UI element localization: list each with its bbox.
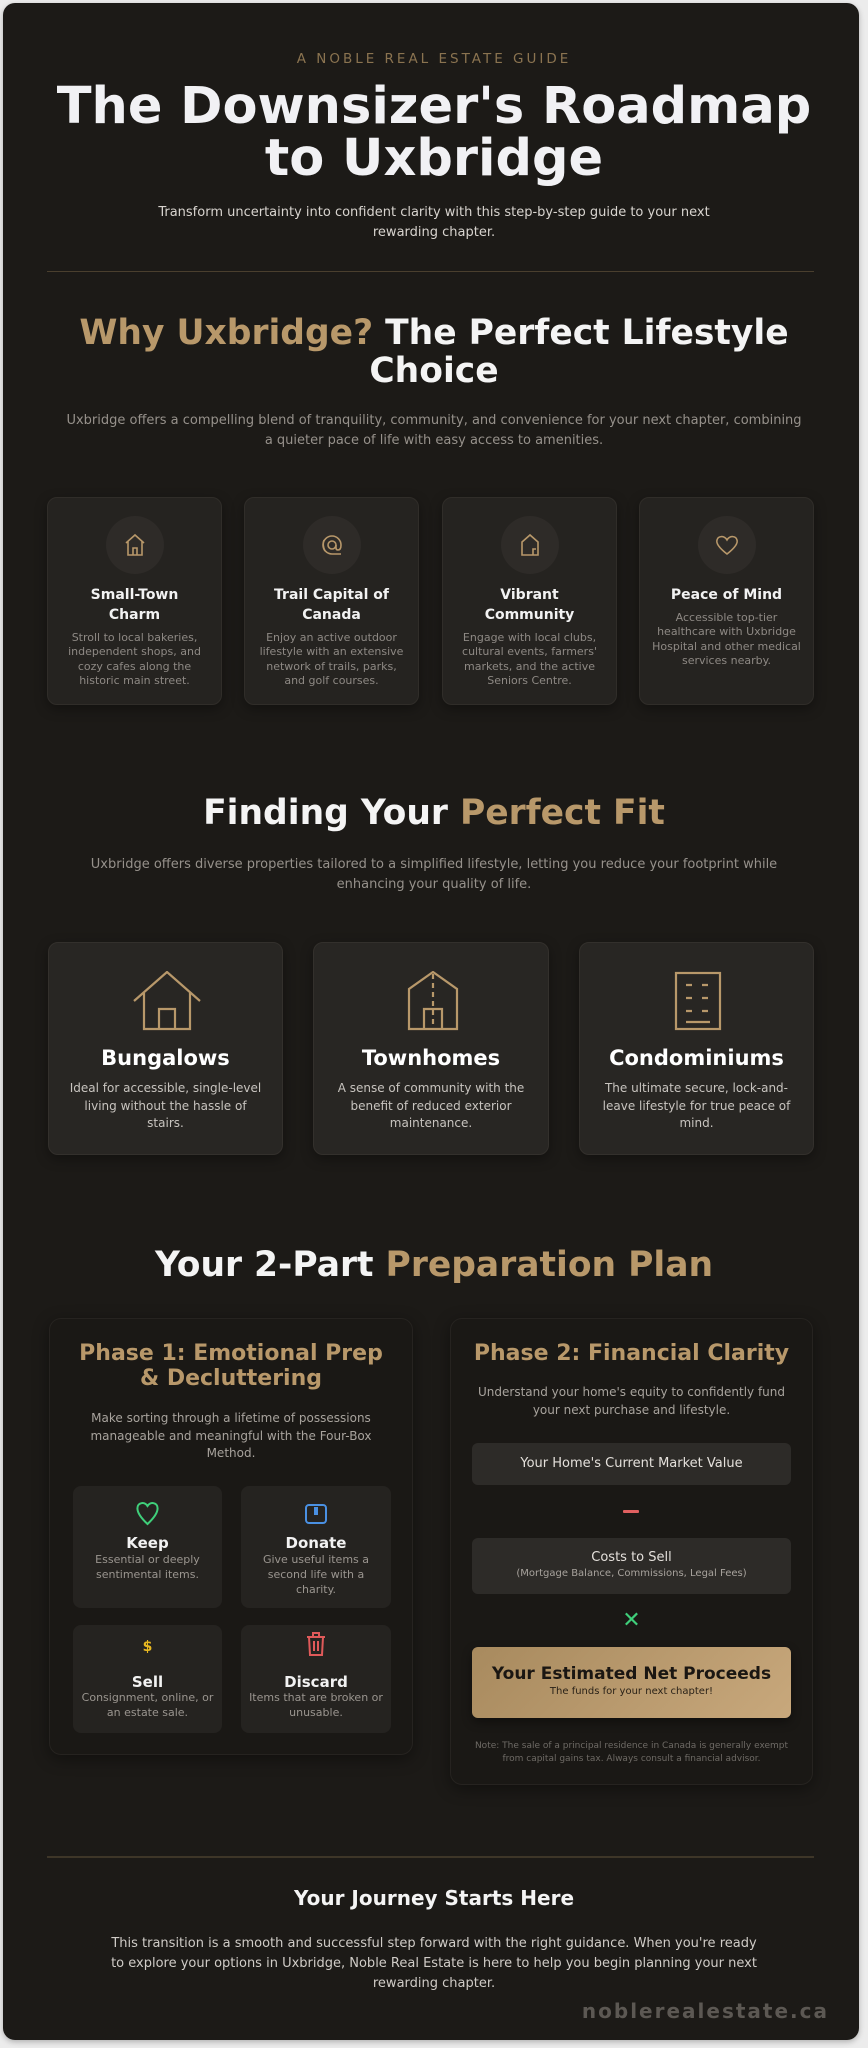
- card: trail capital: Enjoy an active outdoor lifestyle with an extensive network of trails, parks, and golf courses.: [260, 631, 403, 687]
- box: donate: [241, 1486, 391, 1608]
- box: discard: Items that are broken or unusable.: [249, 1691, 383, 1719]
- box: keep: Essential or deeply sentimental items.: [95, 1553, 200, 1581]
- closing paragraph: This transition is a smooth and successful step forward with the right guidance. When you're ready to explore your options in Uxbridge, Noble Real Estate is here to help you begin planning your next rewarding chapter.: [111, 1936, 757, 1991]
- box: discard: Discard: [284, 1673, 348, 1691]
- card: vibrant community: Engage with local clubs, cultural events, farmers' markets, and the active Seniors Centre.: [462, 631, 597, 687]
- heading: perfect fit: Finding Your Perfect Fit: [203, 793, 665, 833]
- box: costs to sell: Costs to Sell: [591, 1550, 672, 1565]
- box: net proceeds: Your Estimated Net Proceeds: [492, 1664, 771, 1684]
- card: peace of mind: healthcare with Uxbridge Hospital and other medical services nearby.: [652, 625, 801, 667]
- box: market value: [472, 1443, 791, 1485]
- box: sell: Consignment, online, or an estate sale.: [82, 1691, 213, 1719]
- card: townhomes: Townhomes: [362, 1046, 500, 1070]
- card: bungalows: Bungalows: [101, 1046, 230, 1070]
- card: small-town charm: [47, 497, 222, 705]
- phase 2 heading: Phase 2: Financial Clarity: [474, 1341, 789, 1366]
- card: bungalows: living without the hassle of: [84, 1098, 247, 1112]
- card: townhomes: [313, 942, 549, 1155]
- website url: noblerealestate.ca: [582, 1999, 829, 2023]
- box: sell: [73, 1625, 222, 1733]
- icon: dollar: $: [143, 1639, 152, 1655]
- card: peace of mind: [639, 497, 814, 705]
- panel: phase 2: [450, 1318, 813, 1785]
- title: The Downsizer's Roadmap: [57, 77, 811, 136]
- card: townhomes: A sense of community with the benefit of reduced exterior maintenance.: [338, 1081, 524, 1130]
- card: small-town charm: Small-Town: [91, 587, 178, 603]
- title: [57, 77, 811, 188]
- card: vibrant community: [442, 497, 617, 705]
- icon: blue donate box: [305, 1504, 327, 1524]
- icon: trail swirl: [303, 516, 361, 574]
- card: trail capital: [244, 497, 419, 705]
- box: costs to sell: [472, 1538, 791, 1594]
- card: bungalows: stairs.: [147, 1116, 184, 1130]
- phase 1 heading: & Decluttering: [140, 1366, 322, 1391]
- heading: preparation plan: Your 2-Part Preparation Plan: [155, 1245, 713, 1285]
- phase 1 heading: [79, 1341, 383, 1391]
- icon: trash can: [307, 1632, 325, 1656]
- subtitle: [158, 205, 710, 240]
- card: bungalows: [48, 942, 283, 1155]
- card: bungalows: Ideal for accessible, single-level: [70, 1081, 261, 1095]
- icon: townhome: [408, 971, 458, 1030]
- box: sell: Sell: [132, 1673, 163, 1691]
- card: small-town charm: Charm: [109, 607, 160, 623]
- card: peace of mind: Peace of Mind: [671, 587, 782, 603]
- box: net proceeds: The funds for your next chapter!: [550, 1686, 713, 1697]
- subtitle: Transform uncertainty into confident clarity with this step-by-step guide to your next: [158, 205, 710, 220]
- icon: house: [106, 516, 164, 574]
- card: vibrant community: Vibrant: [500, 587, 559, 603]
- icon: heart: [698, 516, 756, 574]
- icon: green heart: [136, 1502, 159, 1526]
- title: to Uxbridge: [265, 129, 603, 188]
- card: vibrant community: Community: [485, 607, 574, 623]
- card: condominiums: Condominiums: [609, 1046, 784, 1070]
- card: trail capital: Trail Capital of: [274, 587, 389, 603]
- icon: bungalow: [133, 971, 201, 1030]
- box: donate: Donate: [286, 1534, 346, 1552]
- card: condominiums: [579, 942, 814, 1155]
- card: condominiums: The ultimate secure, lock-and-leave lifestyle for true peace of mind.: [603, 1081, 790, 1130]
- phase 2 description: Understand your home's equity to confidently fund your next purchase and lifestyle.: [478, 1385, 785, 1416]
- box: discard: [241, 1625, 391, 1733]
- card: peace of mind: Accessible top-tier: [676, 611, 777, 624]
- card: small-town charm: Stroll to local bakeries, independent shops, and cozy cafes along the historic main street.: [68, 631, 201, 687]
- panel: phase 1: [49, 1318, 413, 1755]
- icon: minus: [623, 1510, 639, 1513]
- box: keep: [73, 1486, 222, 1608]
- icon: condo tower: [674, 972, 722, 1030]
- box: costs to sell: (Mortgage Balance, Commissions, Legal Fees): [516, 1568, 747, 1579]
- box: net proceeds: [472, 1647, 791, 1718]
- box: market value: Your Home's Current Market Value: [520, 1456, 743, 1471]
- phase 1 heading: Phase 1: Emotional Prep: [79, 1341, 383, 1366]
- phase 1 description: Make sorting through a lifetime of possessions manageable and meaningful with the Four-Box Method.: [90, 1411, 372, 1460]
- card: trail capital: Canada: [302, 607, 361, 623]
- heading: journey: Your Journey Starts Here: [294, 1886, 574, 1910]
- heading: why uxbridge: Why Uxbridge? The Perfect Lifestyle Choice: [79, 313, 789, 391]
- tagline: A NOBLE REAL ESTATE GUIDE: [297, 51, 571, 67]
- intro: why uxbridge: Uxbridge offers a compelling blend of tranquility, community, and convenience for your next chapter, combining a quieter pace of life with easy access to amenities.: [66, 413, 802, 448]
- icon: house outline: [501, 516, 559, 574]
- icon: equals cross: ✕: [622, 1608, 641, 1633]
- note: Note: The sale of a principal residence in Canada is generally exempt from capital gains tax. Always consult a financial advisor.: [475, 1741, 788, 1764]
- intro: perfect fit: Uxbridge offers diverse properties tailored to a simplified lifestyle, letting you reduce your footprint while enhancing your quality of life.: [91, 857, 777, 892]
- box: donate: Give useful items a second life with a charity.: [263, 1553, 369, 1596]
- subtitle: rewarding chapter.: [373, 225, 495, 240]
- box: keep: Keep: [126, 1534, 169, 1552]
